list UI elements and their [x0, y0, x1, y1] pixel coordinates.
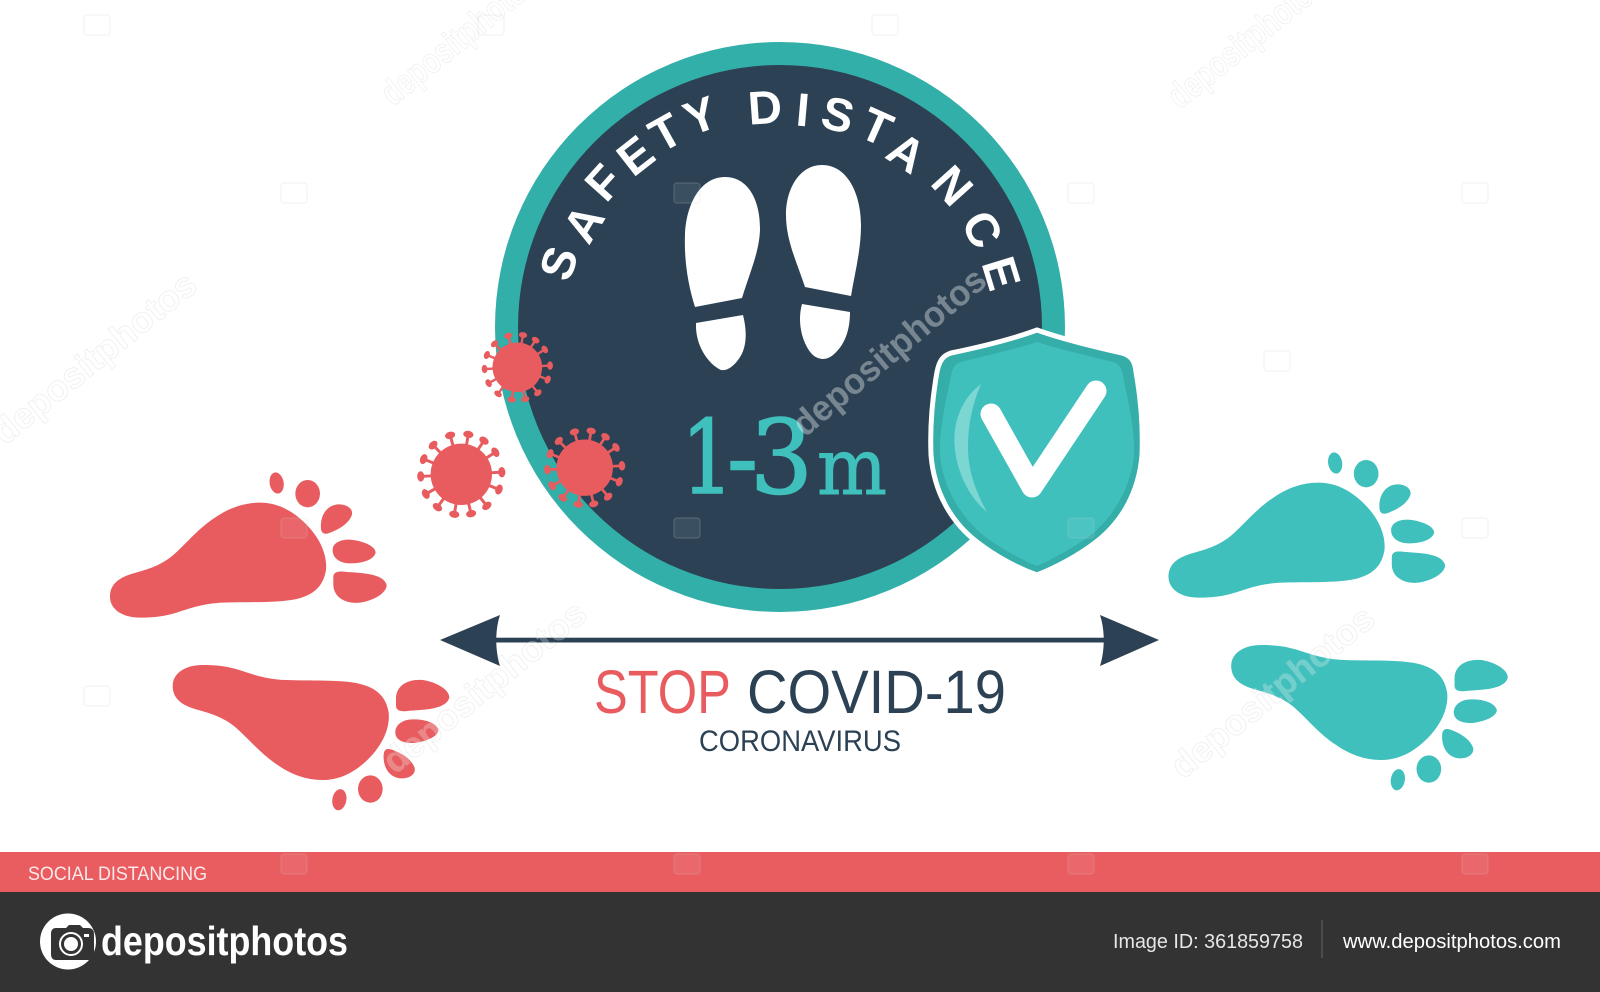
- teal footprints: [1168, 451, 1508, 791]
- safety distance badge: [495, 42, 1065, 612]
- image id: Image ID: 361859758: [1113, 931, 1303, 953]
- shield inner: [940, 342, 1134, 566]
- dark footer bar: [0, 892, 1600, 992]
- watermark overlay: depositphotos: [784, 258, 994, 444]
- website url: www.depositphotos.com: [1342, 931, 1561, 953]
- virus particles: [417, 331, 625, 519]
- teal foot upper: [1168, 451, 1445, 598]
- red footer band: [0, 852, 1600, 892]
- virus right: [544, 427, 625, 508]
- virus left: [417, 430, 506, 519]
- shield highlight: [954, 384, 987, 512]
- badge ring: [495, 42, 1065, 612]
- badge dark disc: [518, 65, 1042, 589]
- red footprints: [110, 471, 449, 811]
- red foot upper: [110, 471, 387, 618]
- check mark: [991, 391, 1096, 487]
- icon: shield with check: [931, 330, 1142, 575]
- separator: [1322, 920, 1323, 958]
- teal foot lower: [1231, 645, 1508, 791]
- subtitle: coronavirus: CORONAVIRUS: [699, 725, 901, 758]
- distance value: 1-3m: [681, 399, 887, 518]
- distance value: 1-3m: 3: [750, 399, 813, 518]
- curved heading: safety distance: SAFETY DISTANCE: [528, 79, 1031, 296]
- icon: camera logo: [40, 914, 96, 970]
- watermark overlay: depositphotos: [374, 592, 594, 781]
- watermark overlay: depositphotos: [1162, 597, 1382, 786]
- icon: left shoe print: [685, 177, 760, 370]
- distance value: 1-3m: 1: [681, 399, 734, 518]
- distance value: 1-3m: -: [727, 399, 758, 518]
- logo wordmark: depositphotos: [101, 918, 348, 964]
- band label: SOCIAL DISTANCING: [28, 864, 207, 885]
- virus top: [481, 331, 553, 403]
- distance value: 1-3m: m: [817, 423, 887, 513]
- icon: right shoe print: [786, 165, 861, 359]
- title: stop covid-19: COVID-19: [747, 658, 1006, 726]
- title: stop covid-19: STOP: [594, 658, 730, 726]
- red foot lower: [173, 665, 449, 811]
- shield outer: [931, 330, 1142, 575]
- double-headed distance arrow: [440, 615, 1159, 666]
